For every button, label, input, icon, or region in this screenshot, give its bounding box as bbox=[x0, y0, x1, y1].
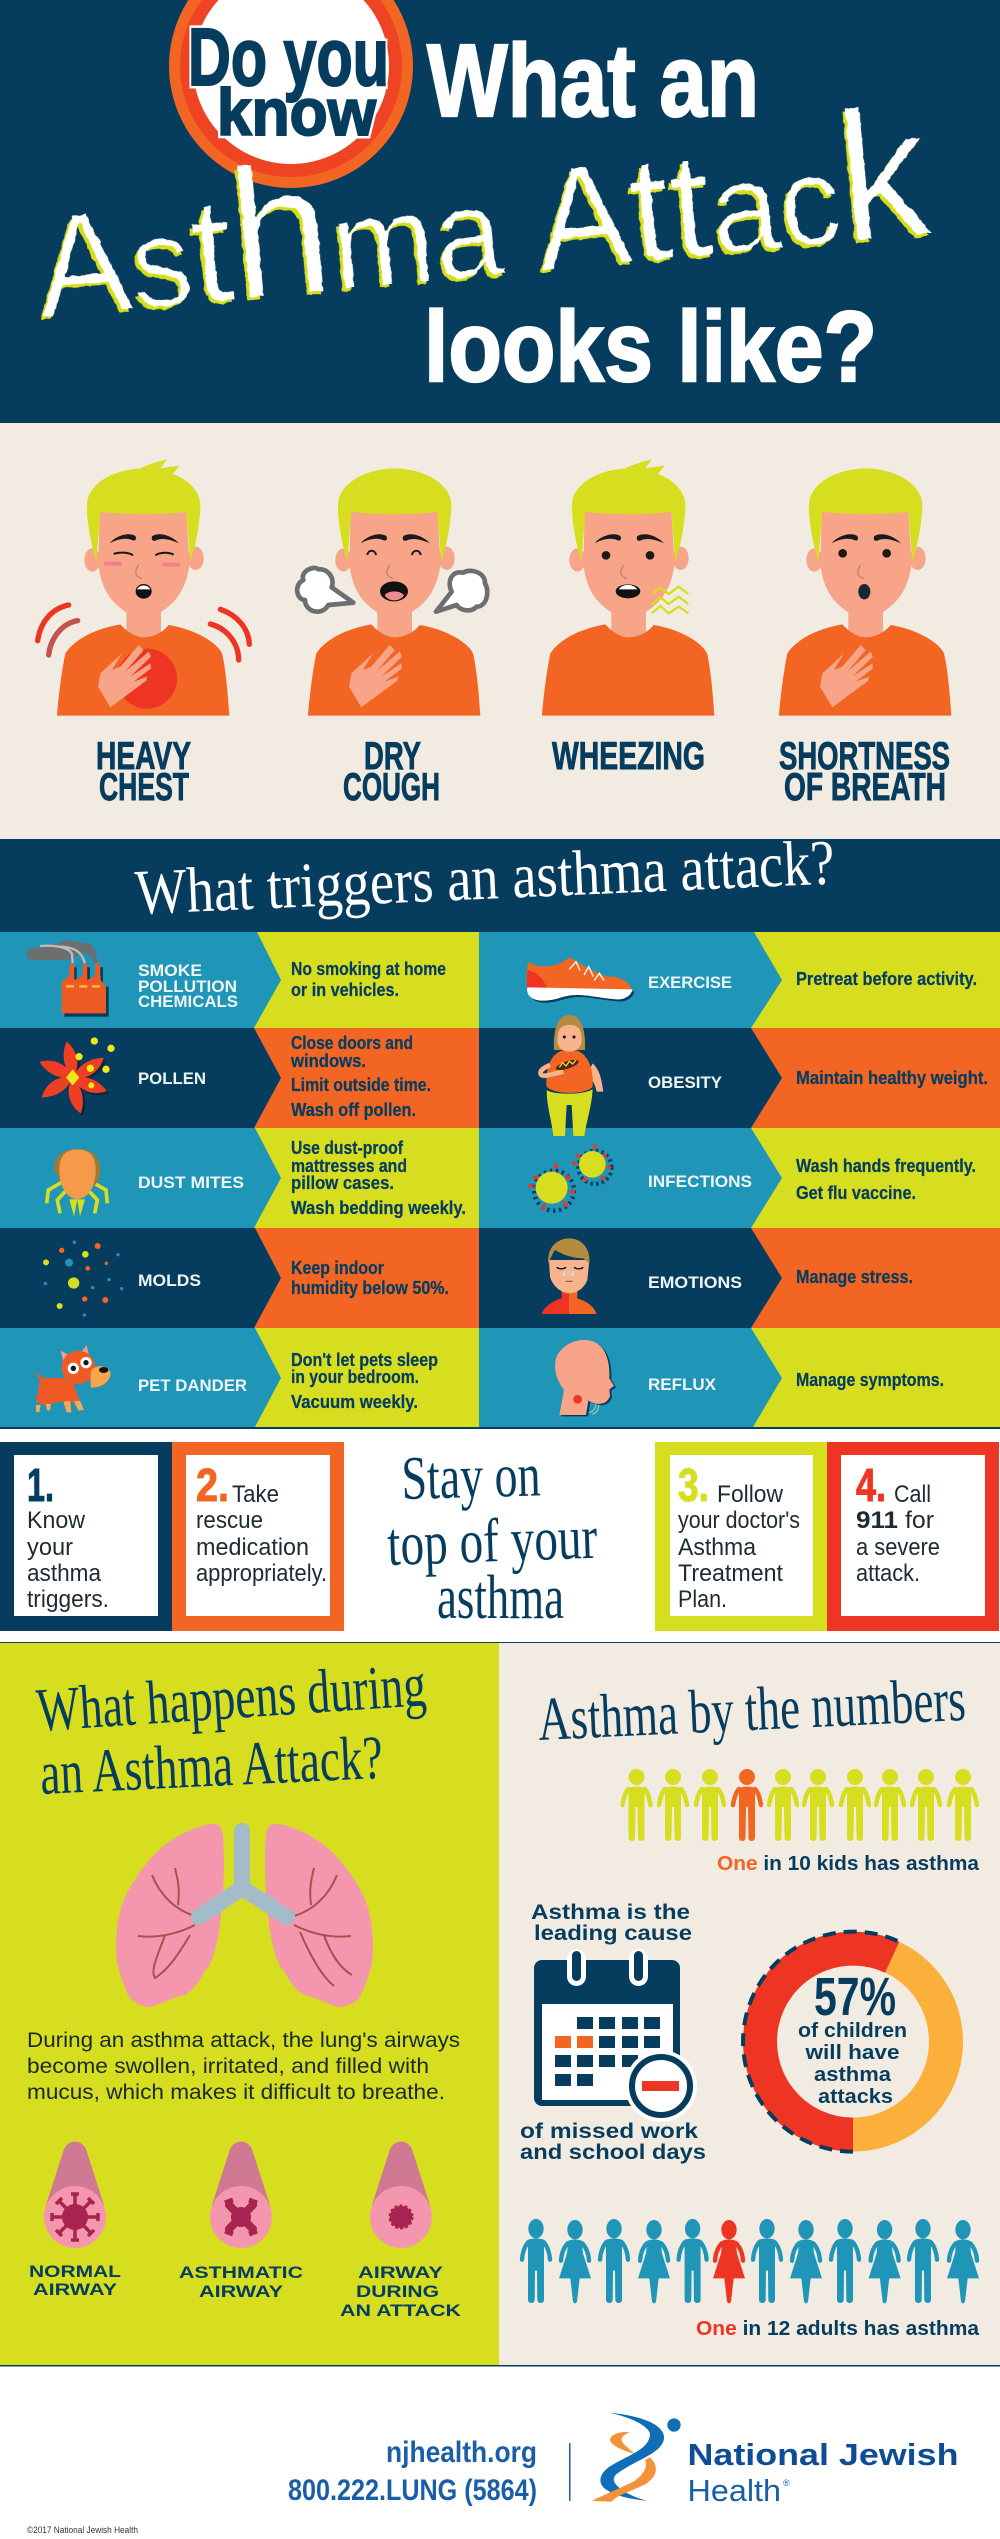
step 2 bbox=[172, 1442, 344, 1631]
label: normal airway: NORMAL bbox=[29, 2262, 121, 2281]
badge: do you know: Do you bbox=[188, 12, 389, 103]
advice: pollen: Wash off pollen. bbox=[291, 1100, 416, 1120]
advice: obesity: Maintain healthy weight. bbox=[796, 1068, 988, 1088]
text: leading cause bbox=[531, 1901, 692, 1945]
step 1: asthma bbox=[27, 1560, 102, 1587]
icon: dog bbox=[34, 1345, 111, 1412]
illustration: dry cough boy bbox=[297, 468, 487, 716]
panel: page header bbox=[0, 0, 1000, 423]
text: during an asthma attack: During an asthma attack, the lung's airways bbox=[27, 2029, 460, 2052]
advice: emotions: Manage stress. bbox=[796, 1267, 913, 1287]
label: asthmatic airway: AIRWAY bbox=[199, 2282, 284, 2301]
label: smoke pollution chemicals bbox=[138, 961, 238, 1011]
illustration: airway during attack bbox=[370, 2142, 432, 2248]
panel: symptoms bbox=[0, 423, 1000, 839]
label: normal airway bbox=[29, 2262, 121, 2299]
text: during an asthma attack: become swollen, irritated, and filled with bbox=[27, 2055, 429, 2078]
illustration: normal airway bbox=[44, 2142, 106, 2248]
step 1 bbox=[0, 1442, 172, 1631]
icon: calendar bbox=[534, 1949, 697, 2122]
text: during an asthma attack: mucus, which makes it difficult to breathe. bbox=[27, 2081, 445, 2104]
label: molds: MOLDS bbox=[138, 1271, 201, 1290]
illustration: shortness of breath boy bbox=[779, 468, 951, 716]
label: asthmatic airway bbox=[179, 2263, 303, 2301]
advice: infections: Wash hands frequently. bbox=[796, 1156, 976, 1176]
logo: wordmark: ® bbox=[783, 2478, 790, 2488]
label: emotions: EMOTIONS bbox=[648, 1273, 742, 1292]
label: heavy chest bbox=[96, 735, 191, 809]
advice: molds bbox=[291, 1258, 449, 1298]
step 4: Call bbox=[894, 1481, 931, 1508]
badge: do you know: know bbox=[217, 75, 377, 149]
label: normal airway: AIRWAY bbox=[33, 2280, 118, 2299]
advice: molds: humidity below 50%. bbox=[291, 1278, 449, 1298]
panel: asthma by the numbers bbox=[499, 1643, 1000, 2365]
step 3: Treatment bbox=[678, 1560, 783, 1587]
title: what an: What an bbox=[427, 23, 759, 138]
advice: infections: Get flu vaccine. bbox=[796, 1183, 916, 1203]
icon: minus badge bbox=[625, 2050, 697, 2122]
text: missed work: and school days bbox=[520, 2141, 706, 2164]
chart: 57 percent donut: attacks bbox=[818, 2086, 893, 2108]
label: exercise: EXERCISE bbox=[648, 973, 732, 992]
label: pet dander: PET DANDER bbox=[138, 1376, 247, 1395]
advice: pollen: Limit outside time. bbox=[291, 1075, 431, 1095]
illustration: lungs bbox=[116, 1824, 373, 2007]
label: smoke pollution chemicals: POLLUTION bbox=[138, 977, 237, 996]
logo: wordmark: Health bbox=[688, 2473, 781, 2508]
chart: 57 percent donut: will have bbox=[804, 2042, 900, 2064]
heading: what happens: an Asthma Attack? bbox=[38, 1724, 384, 1808]
advice: infections bbox=[796, 1156, 976, 1203]
step 3: your doctor's bbox=[678, 1507, 800, 1534]
pictogram: kids bbox=[622, 1769, 977, 1841]
step 4: 4. bbox=[856, 1459, 886, 1511]
step 3: 3. bbox=[678, 1459, 709, 1511]
trigger backgrounds right bbox=[479, 932, 1000, 1427]
advice: exercise: Pretreat before activity. bbox=[796, 969, 977, 989]
heading: what happens: What happens during bbox=[34, 1651, 428, 1745]
label: heavy chest: HEAVY bbox=[96, 735, 191, 778]
callout: stay on top of your asthma: Stay on bbox=[401, 1441, 541, 1513]
advice: dust mites: Use dust-proof bbox=[291, 1138, 404, 1158]
step 1: 1. bbox=[27, 1459, 54, 1511]
panel: triggers bbox=[0, 827, 1000, 1429]
step 2: 2. bbox=[196, 1459, 229, 1511]
label: smoke pollution chemicals: SMOKE bbox=[138, 961, 202, 980]
advice: smoke bbox=[291, 959, 446, 1000]
icon: viruses bbox=[528, 1145, 612, 1211]
badge: do you know bbox=[169, 0, 413, 188]
chart: 57 percent donut bbox=[743, 1932, 946, 2152]
contact: phone: 800.222.LUNG (5864) bbox=[288, 2474, 537, 2507]
icon: reflux head bbox=[555, 1340, 616, 1416]
pictogram: adults bbox=[522, 2219, 979, 2303]
heading: what triggers: What triggers an asthma attack? bbox=[134, 827, 836, 928]
step 2: appropriately. bbox=[196, 1560, 327, 1587]
label: dust mites: DUST MITES bbox=[138, 1173, 244, 1192]
label: infections: INFECTIONS bbox=[648, 1172, 752, 1191]
text: leading cause: Asthma is the bbox=[531, 1901, 690, 1924]
step 2: rescue bbox=[196, 1507, 263, 1534]
step 3: Asthma bbox=[678, 1534, 757, 1561]
callout: stay on top of your asthma: top of your bbox=[386, 1504, 599, 1579]
label: airway during an attack bbox=[340, 2263, 462, 2320]
title: asthma attack: Asthma Attack bbox=[23, 72, 936, 361]
advice: dust mites: pillow cases. bbox=[291, 1173, 394, 1193]
advice: smoke: No smoking at home bbox=[291, 959, 446, 979]
label: dry cough bbox=[343, 735, 440, 809]
chart: 57 percent donut: asthma bbox=[814, 2064, 892, 2086]
icon: mold spores bbox=[43, 1241, 123, 1317]
illustration: wheezing boy bbox=[542, 459, 714, 716]
badge: do you know: know bbox=[217, 75, 377, 149]
title: asthma attack: Asthma Attack bbox=[25, 68, 938, 358]
label: reflux: REFLUX bbox=[648, 1375, 717, 1394]
label: shortness of breath bbox=[779, 735, 950, 809]
icon: obesity girl bbox=[540, 1015, 603, 1136]
step 1: Know bbox=[27, 1507, 86, 1534]
icon: pollen flower bbox=[37, 1037, 115, 1117]
text: leading cause: leading cause bbox=[534, 1922, 692, 1945]
advice: pet dander: in your bedroom. bbox=[291, 1367, 419, 1387]
step 3 bbox=[655, 1442, 827, 1631]
label: asthmatic airway: ASTHMATIC bbox=[179, 2263, 303, 2282]
step 3: Plan. bbox=[678, 1586, 727, 1613]
text: missed work bbox=[520, 2120, 706, 2164]
callout: stay on top of your asthma bbox=[386, 1441, 599, 1632]
logo: wordmark: National Jewish bbox=[688, 2437, 958, 2472]
label: airway during an attack: DURING bbox=[356, 2282, 439, 2301]
label: dry cough: COUGH bbox=[343, 766, 440, 809]
panel: stay on top steps bbox=[0, 1441, 1000, 1644]
stat: one in 12 adults: One in 12 adults has asthma bbox=[696, 2318, 980, 2340]
advice: pollen: Close doors and bbox=[291, 1033, 413, 1053]
label: smoke pollution chemicals: CHEMICALS bbox=[138, 992, 238, 1011]
advice: pet dander bbox=[291, 1350, 438, 1412]
icon: dust mite bbox=[47, 1149, 107, 1217]
illustration: asthmatic airway bbox=[210, 2142, 272, 2248]
title: looks like: looks like? bbox=[424, 291, 877, 403]
callout: stay on top of your asthma: asthma bbox=[437, 1564, 564, 1632]
logo: wordmark bbox=[688, 2437, 958, 2508]
step 1: triggers. bbox=[27, 1586, 109, 1613]
heading: what happens bbox=[34, 1651, 428, 1808]
stat: one in 10 kids: One in 10 kids has asthma bbox=[717, 1853, 980, 1875]
label: airway during an attack: AN ATTACK bbox=[340, 2301, 462, 2320]
step 1: your bbox=[27, 1534, 73, 1561]
contact: website: njhealth.org bbox=[386, 2436, 537, 2469]
advice: dust mites bbox=[291, 1138, 466, 1218]
advice: pollen: windows. bbox=[290, 1051, 366, 1071]
advice: dust mites: mattresses and bbox=[291, 1156, 407, 1176]
panel: what happens during an attack bbox=[0, 1643, 499, 2365]
label: dry cough: DRY bbox=[364, 735, 421, 778]
step 4 bbox=[827, 1442, 999, 1631]
chart: 57 percent donut: of children bbox=[798, 2020, 907, 2042]
step 2: medication bbox=[196, 1534, 309, 1561]
advice: pet dander: Vacuum weekly. bbox=[291, 1392, 418, 1412]
advice: smoke: or in vehicles. bbox=[291, 980, 399, 1000]
label: heavy chest: CHEST bbox=[99, 766, 189, 809]
chart: 57 percent donut: 57% bbox=[814, 1967, 896, 2027]
step 4: attack. bbox=[856, 1560, 920, 1587]
step 3: Follow bbox=[717, 1481, 784, 1508]
illustration: heavy chest boy bbox=[38, 459, 249, 716]
badge: do you know: Do you bbox=[188, 12, 389, 103]
advice: dust mites: Wash bedding weekly. bbox=[291, 1198, 466, 1218]
label: pollen: POLLEN bbox=[138, 1069, 206, 1088]
advice: reflux: Manage symptoms. bbox=[796, 1370, 944, 1390]
copyright: ©2017 National Jewish Health bbox=[27, 2525, 138, 2535]
panel: footer bbox=[27, 2413, 958, 2535]
step 4: a severe bbox=[856, 1534, 940, 1561]
icon: sad face bbox=[542, 1238, 597, 1314]
label: obesity: OBESITY bbox=[648, 1073, 723, 1092]
text: missed work: of missed work bbox=[520, 2120, 698, 2143]
trigger backgrounds left bbox=[0, 932, 479, 1427]
label: wheezing: WHEEZING bbox=[552, 735, 705, 778]
icon: factory smoke bbox=[27, 941, 109, 1017]
advice: pet dander: Don't let pets sleep bbox=[291, 1350, 438, 1370]
logo: national jewish health mark bbox=[592, 2413, 681, 2502]
step 2: Take bbox=[232, 1481, 279, 1508]
step 4: 911 bbox=[856, 1507, 898, 1534]
step 4: for bbox=[905, 1507, 934, 1534]
advice: pollen bbox=[290, 1033, 431, 1120]
text: during an asthma attack bbox=[27, 2029, 460, 2104]
icon: shoe bbox=[526, 957, 634, 1003]
advice: molds: Keep indoor bbox=[291, 1258, 384, 1278]
label: airway during an attack: AIRWAY bbox=[358, 2263, 444, 2282]
